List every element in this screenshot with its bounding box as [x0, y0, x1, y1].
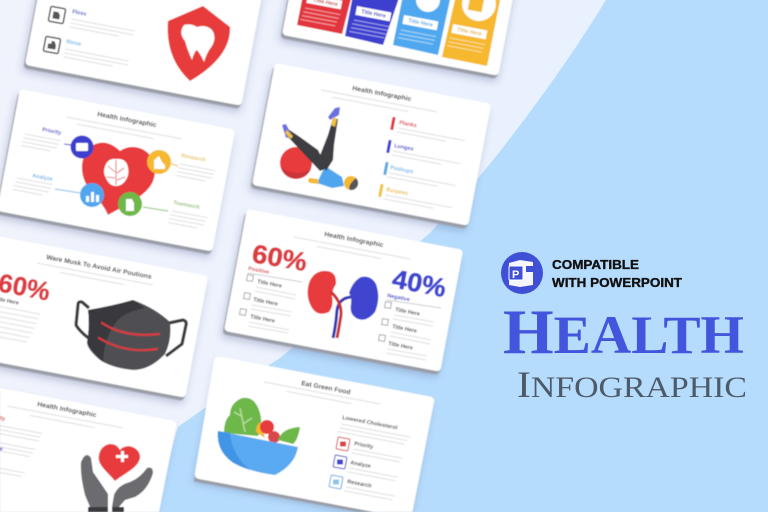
connector arrows	[55, 144, 178, 211]
teamwork label	[168, 200, 207, 229]
subtitle: infographic: INFOGRAPHIC	[517, 365, 747, 406]
priority item: Priority	[354, 441, 375, 451]
yellow column title: Title Here	[457, 27, 482, 38]
right checklist: Title Here	[392, 324, 417, 335]
compatible with powerpoint text: COMPATIBLE	[552, 258, 639, 272]
red column	[297, 0, 352, 34]
priority label	[21, 127, 63, 152]
lowered cholesterol heading: Lowered Cholesterol	[342, 415, 398, 431]
exercise card title: Health Infographic	[352, 85, 412, 103]
pushups label	[383, 162, 456, 190]
lunges label	[386, 140, 460, 168]
icon: red heart	[82, 143, 155, 215]
icon: analyze circle	[80, 183, 104, 207]
icon: research circle	[147, 150, 171, 174]
icon: heart with cross	[99, 444, 140, 481]
illustration: person on exercise ball	[280, 107, 358, 190]
research label: Research	[181, 153, 207, 164]
priority label: Priority	[42, 127, 63, 137]
pushups label: Pushups	[390, 165, 414, 175]
light blue column title: Title Here	[408, 18, 433, 29]
positive label: Positive	[248, 266, 269, 276]
icon: brain	[104, 159, 128, 186]
left checklist	[239, 274, 296, 333]
heart card title: Health Infographic	[97, 111, 157, 129]
compatible with powerpoint text	[552, 258, 682, 290]
left checklist: Title Here	[253, 297, 278, 308]
research label	[176, 153, 215, 182]
yellow column	[442, 0, 501, 66]
blue column title: Title Here	[361, 9, 386, 20]
analyze item	[333, 455, 398, 481]
planks label	[390, 117, 465, 145]
icon: document	[468, 0, 484, 12]
planks label: Planks	[399, 120, 417, 129]
hands card title: Health Infographic	[37, 401, 97, 419]
illustration: face mask	[76, 300, 186, 370]
teamwork label: Teamwork	[173, 200, 201, 211]
panel: top colour columns card	[279, 0, 521, 83]
40% negative stat: 40%	[390, 263, 449, 303]
icon: rinse box	[43, 36, 61, 54]
analyze label: Analyze	[32, 173, 53, 183]
burpees label: Burpees	[386, 187, 408, 197]
left checklist: Title Here	[250, 314, 275, 325]
blue column	[345, 0, 400, 45]
illustration: cupping hands	[81, 455, 153, 512]
mask card title: Ware Musk To Avoid Air Poutions	[46, 254, 152, 281]
research item	[329, 475, 395, 500]
icon: teamwork circle	[118, 192, 142, 216]
lunges label: Lunges	[394, 143, 414, 153]
compatible with powerpoint text: WITH POWERPOINT	[552, 276, 682, 290]
right checklist: Title Here	[388, 341, 413, 352]
illustration: kidneys	[308, 271, 378, 338]
rinse label: Rinse	[66, 39, 81, 48]
panel: salad card	[193, 357, 434, 512]
panel: kidney card	[221, 209, 463, 379]
icon: priority circle	[70, 136, 94, 158]
illustration: salad bowl	[218, 398, 300, 475]
negative label: Negative	[387, 293, 410, 303]
research item: Research	[347, 479, 373, 490]
panel: mask card	[0, 235, 208, 405]
light blue column	[393, 0, 451, 55]
floss label: Floss	[72, 9, 87, 18]
salad card title: Eat Green Food	[301, 380, 351, 396]
icon: powerpoint badge: P	[512, 269, 519, 281]
icon: floss box	[48, 6, 66, 24]
analyze label	[13, 173, 53, 196]
left checklist: Title Here	[257, 279, 282, 290]
kidney card title: Health Infographic	[324, 231, 384, 249]
title: health: HEALTH	[503, 297, 744, 367]
panel: hands and heart card	[0, 388, 176, 512]
icon: tooth shield	[168, 6, 230, 81]
analyze item: Analyze	[350, 460, 371, 470]
panel: heart and brain card	[0, 89, 235, 258]
icon: powerpoint badge	[501, 252, 543, 294]
panel: exercise card	[249, 63, 491, 233]
right checklist: Title Here	[395, 307, 420, 318]
priority item	[336, 437, 402, 462]
60% positive stat: 60%	[250, 238, 309, 277]
right checklist	[378, 301, 434, 360]
panel: tooth card	[22, 0, 264, 113]
burpees label	[378, 184, 452, 212]
